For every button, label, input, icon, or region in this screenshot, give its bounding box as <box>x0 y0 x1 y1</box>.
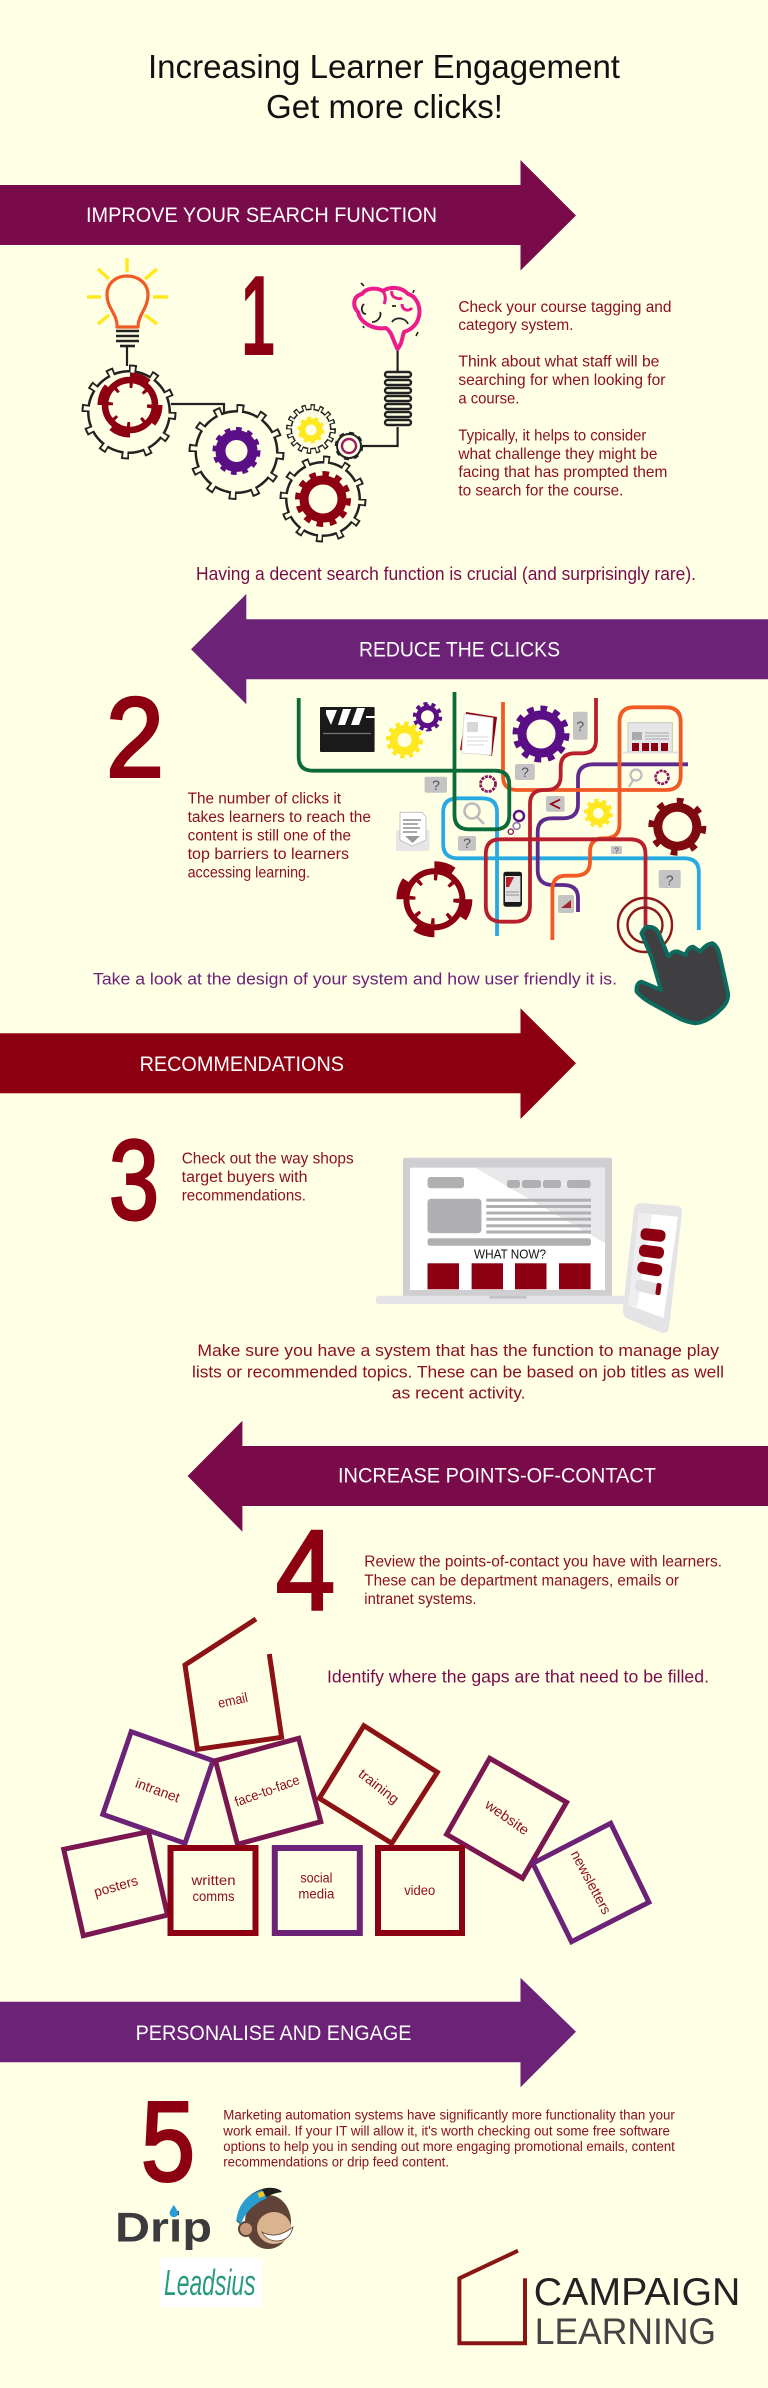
box: training: training <box>355 1765 402 1807</box>
text block: course tagging advice: Think about what staff will be <box>458 354 659 371</box>
box: training <box>319 1726 437 1843</box>
box: video <box>378 1848 462 1933</box>
icon: brain <box>354 283 419 349</box>
box: website <box>447 1758 567 1878</box>
icon: question bubbles: ? <box>432 777 440 793</box>
box: written comms: comms <box>192 1888 234 1904</box>
icon: yellow gear <box>388 724 421 756</box>
panel: section 1 search function <box>0 160 696 584</box>
text block: check out shops <box>182 1150 354 1204</box>
chart: tangled route map of clicks <box>299 692 728 1023</box>
text block: review points of contact: These can be department managers, emails or <box>364 1572 679 1589</box>
box: email: email <box>216 1689 249 1711</box>
number 5: 5 <box>141 2078 195 2204</box>
icon: signal bubble <box>558 895 574 913</box>
text block: course tagging advice: Check your course tagging and <box>458 299 671 316</box>
number 2: 2 <box>106 674 164 800</box>
arrow heading: personalise and engage: PERSONALISE AND ENGAGE <box>136 2021 411 2045</box>
text block: manage play lists: as recent activity. <box>392 1383 526 1402</box>
title: Increasing Learner Engagement <box>148 48 620 85</box>
text block: course tagging advice: Typically, it helps to consider <box>458 428 647 444</box>
icon: magnifier in orange loop <box>629 770 642 787</box>
box: social media: media <box>298 1886 335 1902</box>
box: social media <box>275 1848 360 1933</box>
box: face-to-face: face-to-face <box>232 1771 302 1810</box>
panel: section 3 recommendations <box>0 1008 724 1402</box>
arrow heading: improve your search function <box>0 160 576 270</box>
text block: marketing automation: options to help you in sending out more engaging promotional emails, content <box>223 2139 675 2154</box>
icon: gear outline large with dark red ring <box>86 369 172 455</box>
icon: mini laptop <box>623 723 678 754</box>
icon: laptop with what now screen: WHAT NOW? <box>474 1246 546 1261</box>
text block: course tagging advice <box>457 299 671 500</box>
arrow heading: increase points-of-contact: INCREASE POINTS-OF-CONTACT <box>338 1464 656 1488</box>
icon: dark red gear <box>651 801 703 853</box>
logo: leadsius <box>160 2258 262 2307</box>
panel: section 2 reduce the clicks <box>93 594 768 1023</box>
text block: number of clicks: content is still one of the <box>188 827 351 844</box>
text block: manage play lists: lists or recommended topics. These can be based on job titles as well <box>192 1362 724 1381</box>
logo: campaign learning: LEARNING <box>535 2311 716 2352</box>
icon: question bubbles: ? <box>463 835 471 851</box>
icon: small gear with maroon ring <box>336 433 362 459</box>
text block: check out shops: Check out the way shops <box>182 1150 354 1167</box>
box: website: website <box>481 1796 533 1838</box>
text block: number of clicks: accessing learning. <box>188 865 310 882</box>
text block: review points of contact: Review the points-of-contact you have with learners. <box>364 1554 722 1571</box>
box: intranet: intranet <box>133 1775 182 1805</box>
arrow heading: increase points-of-contact <box>188 1421 768 1532</box>
icon: question bubbles: ? <box>576 718 584 734</box>
text block: number of clicks <box>188 790 371 882</box>
box: newsletters <box>533 1823 649 1942</box>
icon: ring gear maroon small <box>656 771 668 784</box>
icon: ring gear maroon <box>480 776 496 792</box>
text block: course tagging advice: to search for the course. <box>458 483 623 500</box>
icon: pointing hand <box>637 927 728 1023</box>
text block: check out shops: target buyers with <box>182 1169 308 1186</box>
box: face-to-face <box>216 1738 321 1844</box>
icon: magnifier in blue loop <box>464 804 484 824</box>
text block: marketing automation: recommendations or drip feed content. <box>223 2155 449 2170</box>
icon: gear outline with yellow gear <box>289 407 333 451</box>
text block: number of clicks: The number of clicks it <box>188 790 342 807</box>
number 4: 4 <box>276 1507 335 1633</box>
icon: light bulb <box>87 258 168 366</box>
callout: design of your system: Take a look at the design of your system and how user friendly it is. <box>93 969 617 988</box>
icon: gear outline with purple gear <box>194 409 280 495</box>
arrow heading: recommendations: RECOMMENDATIONS <box>140 1052 344 1076</box>
icon: phone with recommendations <box>623 1203 682 1333</box>
text block: number of clicks: top barriers to learners <box>188 846 349 863</box>
text block: number of clicks: takes learners to reach the <box>188 809 371 826</box>
callout: identify gaps: Identify where the gaps are that need to be filled. <box>327 1666 709 1686</box>
arrow heading: personalise and engage <box>0 1978 576 2087</box>
icon: document <box>460 712 497 756</box>
text block: check out shops: recommendations. <box>182 1187 306 1204</box>
icon: big purple gear <box>516 708 566 760</box>
arrow heading: recommendations <box>0 1008 576 1119</box>
icon: question bubbles: ? <box>666 872 674 888</box>
logo: leadsius: Leadsius <box>164 2262 256 2303</box>
text block: course tagging advice: searching for when looking for <box>458 372 666 389</box>
box: video: video <box>404 1882 435 1898</box>
icon: clapperboard <box>320 707 375 752</box>
text block: marketing automation: Marketing automation systems have significantly more functionality than your <box>223 2107 675 2122</box>
box: intranet <box>103 1732 213 1843</box>
panel: section 5 personalise and engage <box>0 1978 740 2352</box>
text block: review points of contact <box>364 1554 722 1608</box>
box: newsletters: newsletters <box>568 1848 615 1917</box>
arrow heading: reduce the clicks <box>191 594 768 704</box>
logo: drip: Drip <box>115 2204 212 2251</box>
box: social media: social <box>300 1870 332 1886</box>
text block: manage play lists: Make sure you have a system that has the function to manage play <box>197 1341 720 1360</box>
title <box>148 48 620 125</box>
box: written comms <box>170 1848 256 1933</box>
arrow heading: improve your search function: IMPROVE YOUR SEARCH FUNCTION <box>86 204 437 227</box>
text block: review points of contact: intranet systems. <box>364 1591 476 1608</box>
panel: section 4 points of contact <box>64 1421 768 1942</box>
connecting wires between gears <box>171 349 398 446</box>
logo: campaign learning: CAMPAIGN <box>534 2271 740 2314</box>
callout: decent search function: Having a decent search function is crucial (and surprisingly rare). <box>196 564 696 584</box>
icon: share bubble <box>546 796 565 812</box>
icon: tiny gears <box>508 811 524 834</box>
arrow heading: reduce the clicks: REDUCE THE CLICKS <box>359 638 560 662</box>
icon: coil spring <box>385 372 411 425</box>
icon: question bubbles: ? <box>521 764 529 780</box>
text block: course tagging advice: what challenge they might be <box>457 446 657 463</box>
icon: target rings <box>618 898 672 952</box>
text block: course tagging advice: a course. <box>458 391 519 408</box>
text block: course tagging advice: facing that has prompted them <box>458 464 667 481</box>
icon: phone <box>503 872 522 907</box>
text block: marketing automation: work email. If your IT will allow it, it's worth checking out some free software <box>222 2123 670 2138</box>
logo: campaign learning <box>459 2251 740 2352</box>
box: posters: posters <box>92 1872 140 1900</box>
box: posters <box>64 1832 168 1936</box>
box: written comms: written <box>190 1872 236 1888</box>
icon: question bubbles: ? <box>614 846 619 856</box>
title: Get more clicks! <box>266 88 503 125</box>
icon: small purple gear <box>414 704 440 730</box>
icon: gear outline with red gear <box>284 460 362 538</box>
text block: course tagging advice: category system. <box>458 317 573 334</box>
number 3: 3 <box>109 1117 159 1243</box>
icon: question bubbles <box>425 712 681 888</box>
text block: manage play lists <box>192 1341 724 1402</box>
text block: marketing automation <box>222 2107 675 2170</box>
icon: laptop with what now screen <box>376 1158 627 1304</box>
number 1: 1 <box>241 253 275 380</box>
logo: mailchimp monkey <box>236 2188 293 2249</box>
icon: email envelope <box>396 812 430 851</box>
route lines <box>299 692 699 940</box>
icon: big ring gear <box>400 865 468 933</box>
icon: yellow gear right <box>585 800 611 826</box>
box: email <box>185 1619 282 1749</box>
